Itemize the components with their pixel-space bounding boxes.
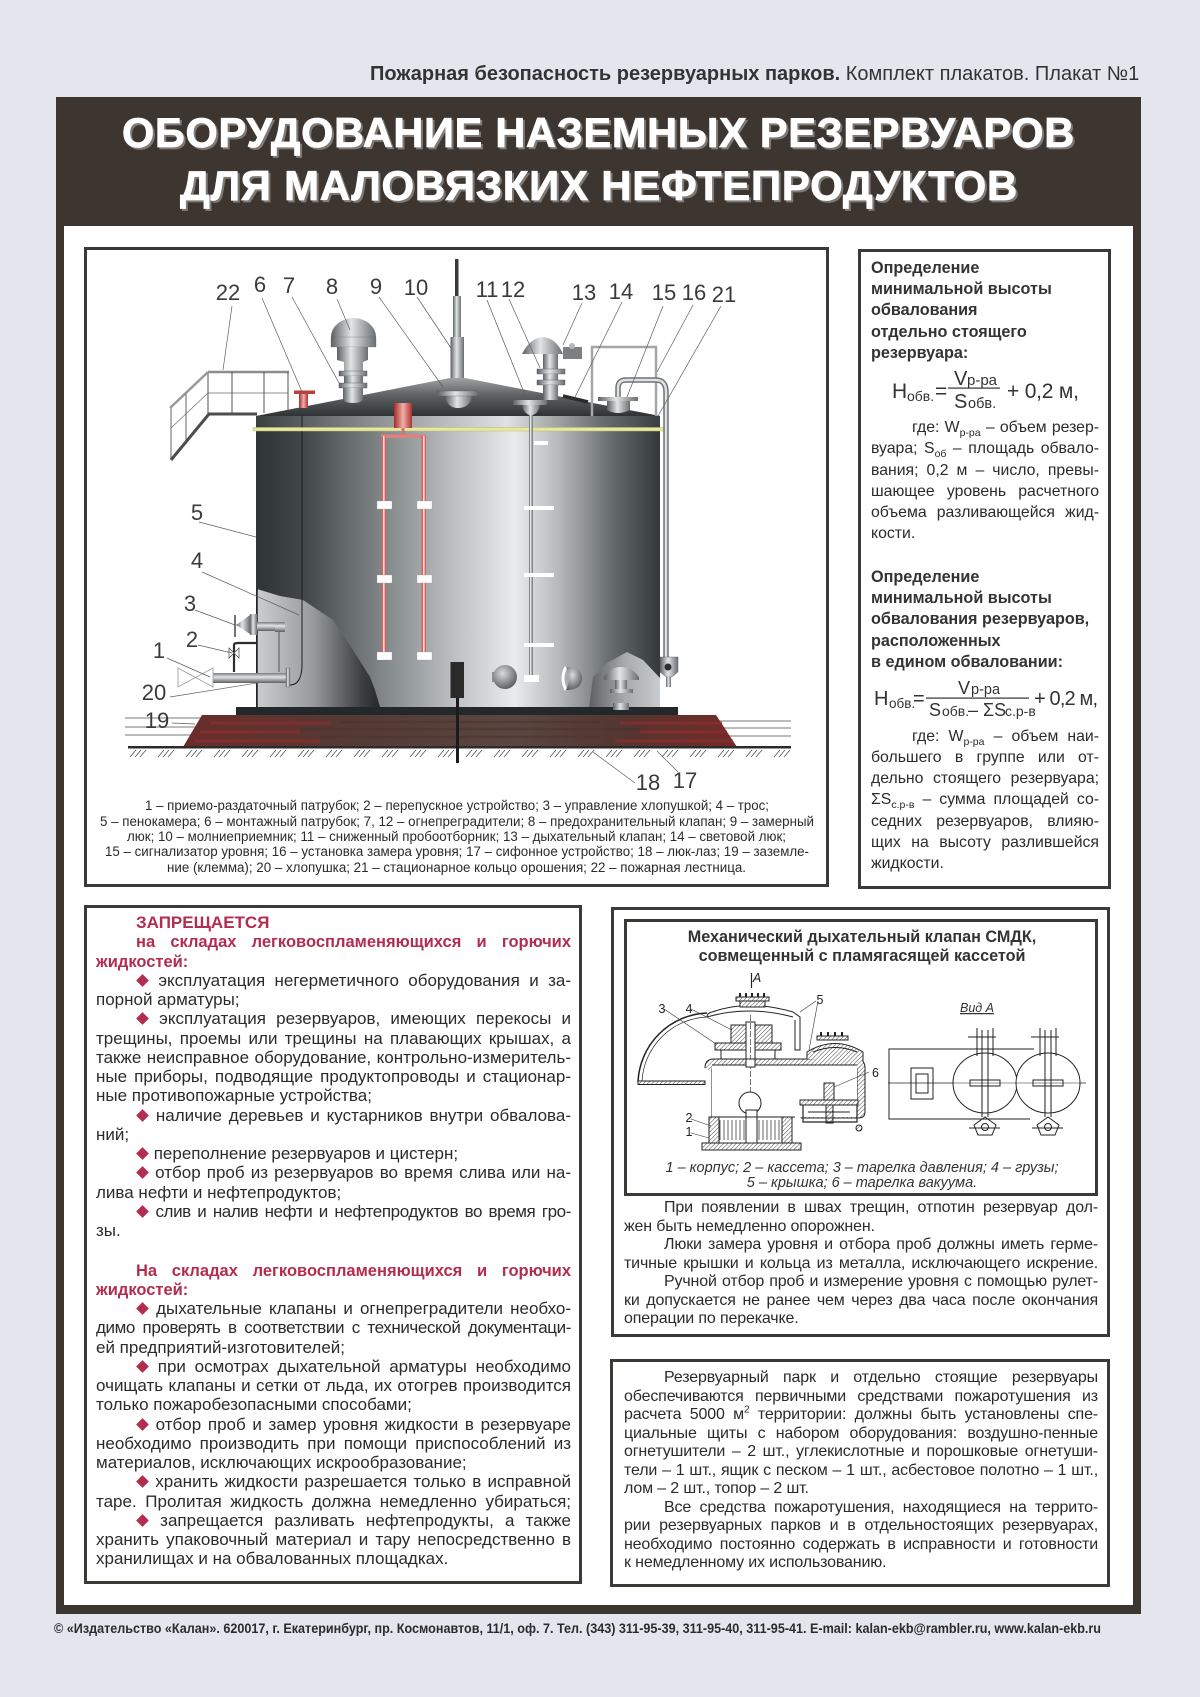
formula 1: + 0,2 м, (1007, 380, 1079, 403)
siphon device 17 (604, 667, 639, 710)
callout numbers: 12 (501, 277, 525, 302)
legend text: 1 – приемо-раздаточный патрубок; 2 – перепускное устройство; 3 – управление хлопушкой; 4 – трос; (145, 798, 769, 813)
formula 1: обв. (968, 396, 996, 412)
text: fire equipment: необходимо постоянно содержать в исправности и готовности (624, 1536, 1098, 1552)
formula 2: V (958, 678, 970, 698)
valve caption: 5 – крышка; 6 – тарелка вакуума. (747, 1175, 977, 1191)
list: forbidden items: эксплуатация негерметичного оборудования и за- (158, 971, 571, 990)
legend text: ние (клемма); 20 – хлопушка; 21 – стационарное кольцо орошения; 22 – пожарная лестница. (167, 860, 746, 875)
callout numbers: 20 (142, 680, 166, 705)
header line: Пожарная безопасность резервуарных парков. Комплект плакатов. Плакат №1 (370, 63, 1139, 85)
subheading: forbidden at warehouses (96, 933, 571, 970)
subheading: rules at warehouses (96, 1262, 571, 1299)
formula 1: обв. (907, 388, 934, 404)
panel: tank diagram (84, 247, 829, 887)
subheading: rules at warehouses: На складах легковоспламеняющихся и горючих (136, 1262, 571, 1280)
list: forbidden items: наличие деревьев и кустарников внутри обвалова- (156, 1106, 571, 1124)
callout numbers: 8 (326, 274, 338, 299)
valve caption: 1 – корпус; 2 – кассета; 3 – тарелка давления; 4 – грузы; (665, 1160, 1059, 1176)
list: rules: отбор проб и замер уровня жидкости в резервуаре (156, 1414, 571, 1434)
legend text: 15 – сигнализатор уровня; 16 – установка замера уровня; 17 – сифонное устройство; 18 – люк-лаз; 19 – заземле- (105, 844, 809, 859)
heading: single tank: минимальной высоты (871, 280, 1052, 298)
heading: single tank: обвалования (871, 301, 978, 319)
text: formula 2 explanation: ΣSс.р-в – сумма площадей со- (871, 791, 1099, 811)
list: rules: димо проверять в соответствии с технической документаци- (96, 1318, 571, 1337)
siphon pipe 21 (618, 380, 678, 687)
panel: prohibitions (84, 905, 582, 1584)
list: rules: дыхательные клапаны и огнепреградители необхо- (156, 1299, 571, 1318)
formula 1: H (892, 380, 907, 403)
callout numbers: 18 (636, 770, 660, 795)
slab (236, 707, 678, 715)
text: fire equipment: расчета 5000 м2 территории: должны быть установлены спе- (624, 1405, 1098, 1423)
formula 2: S (929, 700, 941, 720)
berm (183, 715, 737, 747)
legend text: люк; 10 – молниеприемник; 11 – сниженный пробоотборник; 13 – дыхательный клапан; 14 – световой люк; (127, 829, 786, 844)
subheading: rules at warehouses: жидкостей: (96, 1281, 188, 1299)
callout numbers: 3 (184, 591, 196, 616)
text: valve section notes: жен быть немедленно опорожнен. (624, 1218, 875, 1234)
list: rules: хранить жидкости разрешается только в исправной (155, 1472, 571, 1491)
formula 2: обв. (889, 696, 915, 711)
title: ОБОРУДОВАНИЕ НАЗЕМНЫХ РЕЗЕРВУАРОВ (122, 109, 1075, 156)
callout numbers: 13 (572, 280, 596, 305)
ground line (128, 746, 791, 758)
valve leader lines (664, 1001, 869, 1138)
breathing valve 12, 13 (522, 337, 582, 400)
callout numbers: 2 (186, 627, 198, 652)
foam chamber 5 (377, 403, 432, 660)
hatch ball and dome 18 (492, 665, 582, 690)
list: forbidden items: трещины, проемы или трещины на плавающих крышах, а (96, 1028, 571, 1048)
list: forbidden items: ные противопожарные устройства; (96, 1086, 372, 1105)
valve number labels: 3 (659, 1002, 666, 1016)
view A drawing (888, 1028, 1086, 1135)
callout numbers: 1 (153, 638, 165, 663)
heading: group of tanks (871, 568, 1089, 671)
subheading: forbidden at warehouses: жидкостей: (96, 952, 188, 970)
list: forbidden items (96, 971, 571, 1240)
hatch 9 (437, 391, 478, 408)
heading: group of tanks: минимальной высоты (871, 589, 1052, 607)
heading: single tank: отдельно стоящего (871, 323, 1027, 341)
list: rules: при осмотрах дыхательной арматуры необходимо (158, 1357, 571, 1376)
heading: forbidden: ЗАПРЕЩАЕТСЯ (136, 913, 269, 932)
sampler 11 (513, 400, 554, 682)
formula 2 (874, 678, 1098, 720)
formula 2: + 0,2 м, (1034, 688, 1098, 710)
formula 2: р-ра (971, 682, 1001, 698)
text: valve section notes: Люки замера уровня и отбора проб должны иметь герме- (664, 1236, 1098, 1253)
grounding 19 (450, 662, 464, 763)
gauge hatch 15 (598, 397, 638, 413)
text: formula 1 explanation (871, 419, 1099, 542)
tank wall (256, 416, 660, 707)
formula 1: S (954, 391, 967, 413)
gauge rail 16 (592, 347, 656, 416)
text: formula 1 explanation: вания; 0,2 м – число, превы- (871, 462, 1099, 479)
list: forbidden items: ний; (96, 1125, 129, 1144)
heading: single tank: Определение (871, 258, 979, 276)
text: formula 1 explanation: объема разливающейся жид- (871, 504, 1099, 521)
formula 1: V (954, 368, 968, 390)
text: formula 2 explanation (871, 728, 1099, 872)
callout numbers: 19 (145, 708, 169, 733)
formula 1 (892, 368, 1079, 413)
list: forbidden items: переполнение резервуаров и цистерн; (154, 1144, 458, 1163)
roof (256, 378, 660, 416)
callout numbers: 15 (652, 280, 676, 305)
list: forbidden items: слив и налив нефти и нефтепродуктов во время гро- (155, 1202, 571, 1221)
text: formula 2 explanation: большего в группе или от- (871, 749, 1099, 766)
list: rules: материалов, исключающих искрообразование; (96, 1453, 467, 1472)
text: fire equipment: к немедленному их использованию. (624, 1554, 886, 1571)
heading: single tank (871, 258, 1052, 362)
view A caption: Вид А (960, 1001, 994, 1015)
text: valve section notes: При появлении в швах трещин, отпотин резервуар дол- (664, 1199, 1098, 1216)
callout numbers: 21 (712, 282, 736, 307)
panel: height formulas (858, 249, 1111, 889)
list: forbidden items: эксплуатация резервуаров, имеющих перекосы и (159, 1009, 571, 1028)
mounting pipe 6 (294, 390, 315, 408)
list: rules: только пожаробезопасными способами; (96, 1395, 412, 1414)
title: ДЛЯ МАЛОВЯЗКИХ НЕФТЕПРОДУКТОВ (180, 162, 1018, 209)
valve number labels: 4 (686, 1002, 693, 1016)
valve number labels: 1 (686, 1125, 693, 1139)
text: fire equipment (624, 1369, 1098, 1571)
list: rules: хранилищах и на обвалованных площадках. (96, 1549, 448, 1568)
list: rules: таре. Пролитая жидкость должна немедленно убираться; (96, 1492, 571, 1510)
valve title: совмещенный с пламягасящей кассетой (699, 947, 1025, 965)
valve title: Механический дыхательный клапан СМДК, (688, 928, 1036, 946)
text: formula 1 explanation: кости. (871, 525, 915, 542)
valve number labels (659, 971, 879, 1139)
formula 1: р-ра (967, 372, 998, 389)
ring (253, 428, 665, 431)
text: valve section notes: ки допускается не ранее чем через два часа после окончания (624, 1292, 1098, 1308)
leader lines (167, 297, 721, 783)
text: formula 2 explanation: где: Wр-ра – объем наи- (912, 728, 1099, 748)
list: rules (96, 1299, 571, 1568)
text: formula 1 explanation: шающее уровень расчетного (871, 483, 1099, 500)
list: rules: необходимо производить при помощи приспособлений из (96, 1434, 571, 1453)
text: formula 1 explanation: где: Wр-ра – объем резер- (912, 419, 1099, 439)
valve number labels: 6 (872, 1066, 879, 1080)
callout numbers: 5 (191, 500, 203, 525)
text: fire equipment: обеспечиваются первичными средствами пожаротушения из (624, 1388, 1098, 1404)
list: forbidden items: порной арматуры; (96, 990, 240, 1009)
list: rules: хранить упаковочный материал и тару непосредственно в (96, 1530, 571, 1549)
flap control 3 (235, 614, 285, 672)
text: fire equipment: Все средства пожаротушения, находящиеся на террито- (664, 1498, 1098, 1516)
valve section drawing (638, 973, 865, 1150)
background lines (125, 718, 791, 736)
list: rules: очищать клапаны и сетки от льда, их отогрев производится (96, 1376, 571, 1395)
text: fire equipment: тели – 1 шт., ящик с песком – 1 шт., асбестовое полотно – 1 шт., (624, 1462, 1098, 1478)
text: formula 2 explanation: жидкости. (871, 855, 944, 872)
formula 2: с.р-в (1005, 703, 1036, 719)
callout numbers: 4 (191, 548, 203, 573)
list: forbidden items: лива нефти и нефтепродуктов; (96, 1182, 341, 1202)
flame arrester 7, valve 8 (331, 318, 376, 403)
white poster area (64, 226, 1133, 1605)
panel: valve drawing (624, 919, 1098, 1196)
callout numbers: 22 (216, 280, 240, 305)
heading: group of tanks: обвалования резервуаров, (871, 610, 1089, 628)
list: rules: запрещается разливать нефтепродукты, а также (160, 1511, 571, 1530)
callout numbers: 10 (404, 275, 428, 300)
callout numbers: 6 (254, 272, 266, 297)
callout numbers: 9 (370, 274, 382, 299)
heading: group of tanks: Определение (871, 568, 979, 586)
formula 2: обв. (942, 703, 969, 719)
formula 2: ΣS (983, 700, 1006, 720)
legend text (100, 798, 814, 875)
text: prohibitions and rules (96, 913, 571, 1568)
valve number labels: 2 (686, 1111, 693, 1125)
text: fire equipment: циальные щиты с набором оборудования: воздушно-пенные (624, 1424, 1098, 1442)
heading: single tank: резервуара: (871, 344, 968, 362)
text: fire equipment: огнетушители – 2 шт., углекислотные и порошковые огнетуши- (624, 1443, 1098, 1460)
callout numbers: 14 (609, 279, 633, 304)
bypass device 2 (229, 643, 257, 672)
list: forbidden items: зы. (96, 1221, 121, 1240)
formula 2: H (874, 688, 888, 710)
text: fire equipment: лом – 2 шт., топор – 2 шт. (624, 1480, 809, 1497)
heading: group of tanks: в едином обваловании: (871, 653, 1063, 671)
panel: valve section (611, 907, 1110, 1337)
cutaway left (257, 416, 380, 707)
formula 1: = (935, 380, 947, 403)
text: valve section notes: операции по перекачке. (624, 1310, 799, 1327)
callout numbers: 7 (283, 273, 295, 298)
callout numbers: 16 (682, 280, 706, 305)
panel: fire equipment (610, 1359, 1110, 1587)
valve title (688, 928, 1036, 965)
text: formula 2 explanation: дельно стоящего резервуара; (871, 770, 1099, 787)
text: valve section notes: тичные крышки и кольца из металла, исключающего искрение. (624, 1254, 1098, 1272)
list: rules: ей предприятий-изготовителей; (96, 1338, 345, 1356)
callout numbers: 11 (476, 277, 498, 302)
ladder 22 (170, 372, 289, 460)
text: formula 1 explanation: вуара; Sоб – площадь обвало- (871, 440, 1099, 460)
lightning rod 10 (450, 259, 464, 378)
text: formula 2 explanation: седних резервуаров, влияю- (871, 813, 1099, 830)
legend text: 5 – пенокамера; 6 – монтажный патрубок; 7, 12 – огнепреградители; 8 – предохранительный клапан; 9 – замерный (100, 814, 814, 829)
inlet pipe 1 (178, 668, 290, 687)
text: formula 2 explanation: щих на высоту разлившейся (871, 834, 1099, 851)
text: valve section notes (624, 1199, 1098, 1327)
callout numbers: 17 (673, 768, 697, 793)
formula 2: = (913, 688, 925, 710)
text: fire equipment: рии резервуарных парков и в отдельностоящих резервуарах, (624, 1517, 1098, 1534)
valve number labels: A (752, 971, 761, 985)
text: valve section notes: Ручной отбор проб и измерение уровня с помощью рулет- (664, 1273, 1098, 1290)
cutaway right (589, 652, 660, 708)
text: fire equipment: Резервуарный парк и отдельно стоящие резервуары (664, 1369, 1098, 1386)
heading: group of tanks: расположенных (871, 632, 1001, 650)
skylight 14 (563, 396, 588, 402)
callout numbers (142, 272, 736, 795)
formula 2: – (968, 700, 978, 720)
list: forbidden items: ные приборы, подводящие продуктопроводы и стационар- (96, 1067, 571, 1086)
list: forbidden items: отбор проб из резервуаров во время слива или на- (155, 1163, 571, 1182)
valve caption (665, 1160, 1059, 1191)
subheading: forbidden at warehouses: на складах легковоспламеняющихся и горючих (136, 933, 571, 951)
valve number labels: 5 (817, 993, 824, 1007)
title (122, 109, 1075, 211)
list: forbidden items: также неисправное оборудование, контрольно-измеритель- (96, 1048, 571, 1067)
